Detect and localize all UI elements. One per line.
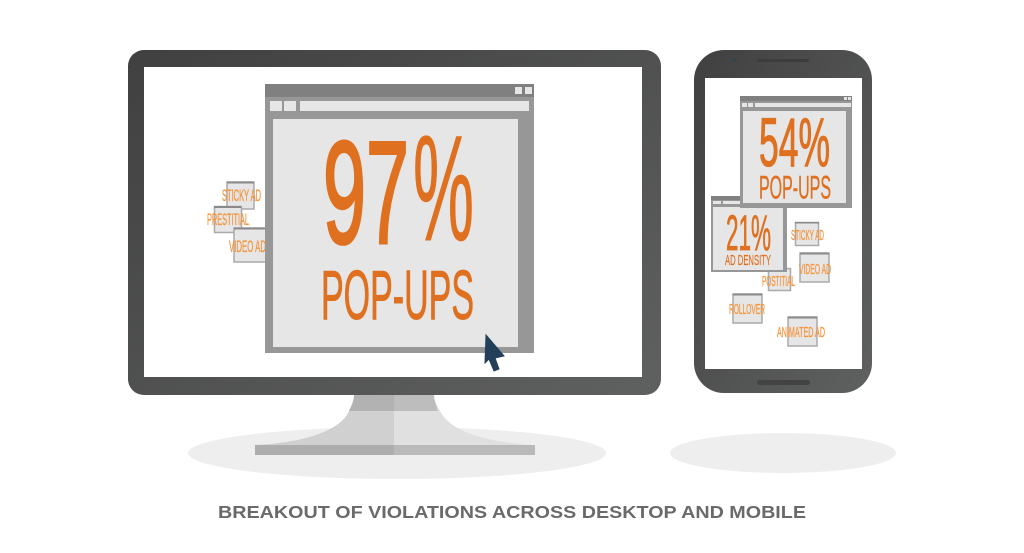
desktop shadow [188, 427, 606, 479]
ad density window: 21% [726, 205, 771, 261]
text: VIDEO AD [799, 261, 831, 278]
caption: BREAKOUT OF VIOLATIONS ACROSS DESKTOP AND MOBILE [218, 502, 806, 522]
small ad windows desktop: STICKY AD [222, 187, 261, 205]
monitor frame [128, 50, 661, 395]
small ad windows desktop [207, 182, 268, 262]
main pop-up window: % [413, 104, 474, 272]
monitor stand [255, 395, 535, 455]
small ad windows mobile: ANIMATED AD [777, 324, 825, 341]
monitor screen [144, 67, 642, 377]
cursor arrow [485, 335, 504, 371]
54% pop-up window [740, 96, 852, 208]
small ad windows desktop: PRESTITIAL [207, 211, 249, 229]
video ad window: VIDEO AD [229, 238, 266, 256]
97%: 97 [323, 111, 409, 274]
phone home button [757, 380, 810, 385]
phone speaker and camera [732, 58, 809, 62]
phone shadow [670, 433, 896, 473]
ad density window [711, 196, 787, 272]
main pop-up window: POP-UPS [321, 256, 474, 334]
phone screen [705, 78, 862, 369]
54%: 54% [759, 104, 830, 181]
small ad windows mobile: POSTITIAL [762, 273, 795, 290]
small ad windows mobile [729, 222, 831, 346]
main pop-up window [265, 84, 534, 353]
small ad windows mobile: ROLLOVER [729, 301, 765, 318]
phone body [694, 50, 872, 393]
ad density label: AD DENSITY [725, 252, 771, 269]
54% pop-up window: POP-UPS [759, 170, 831, 206]
small ad windows mobile: STICKY AD [791, 227, 824, 244]
